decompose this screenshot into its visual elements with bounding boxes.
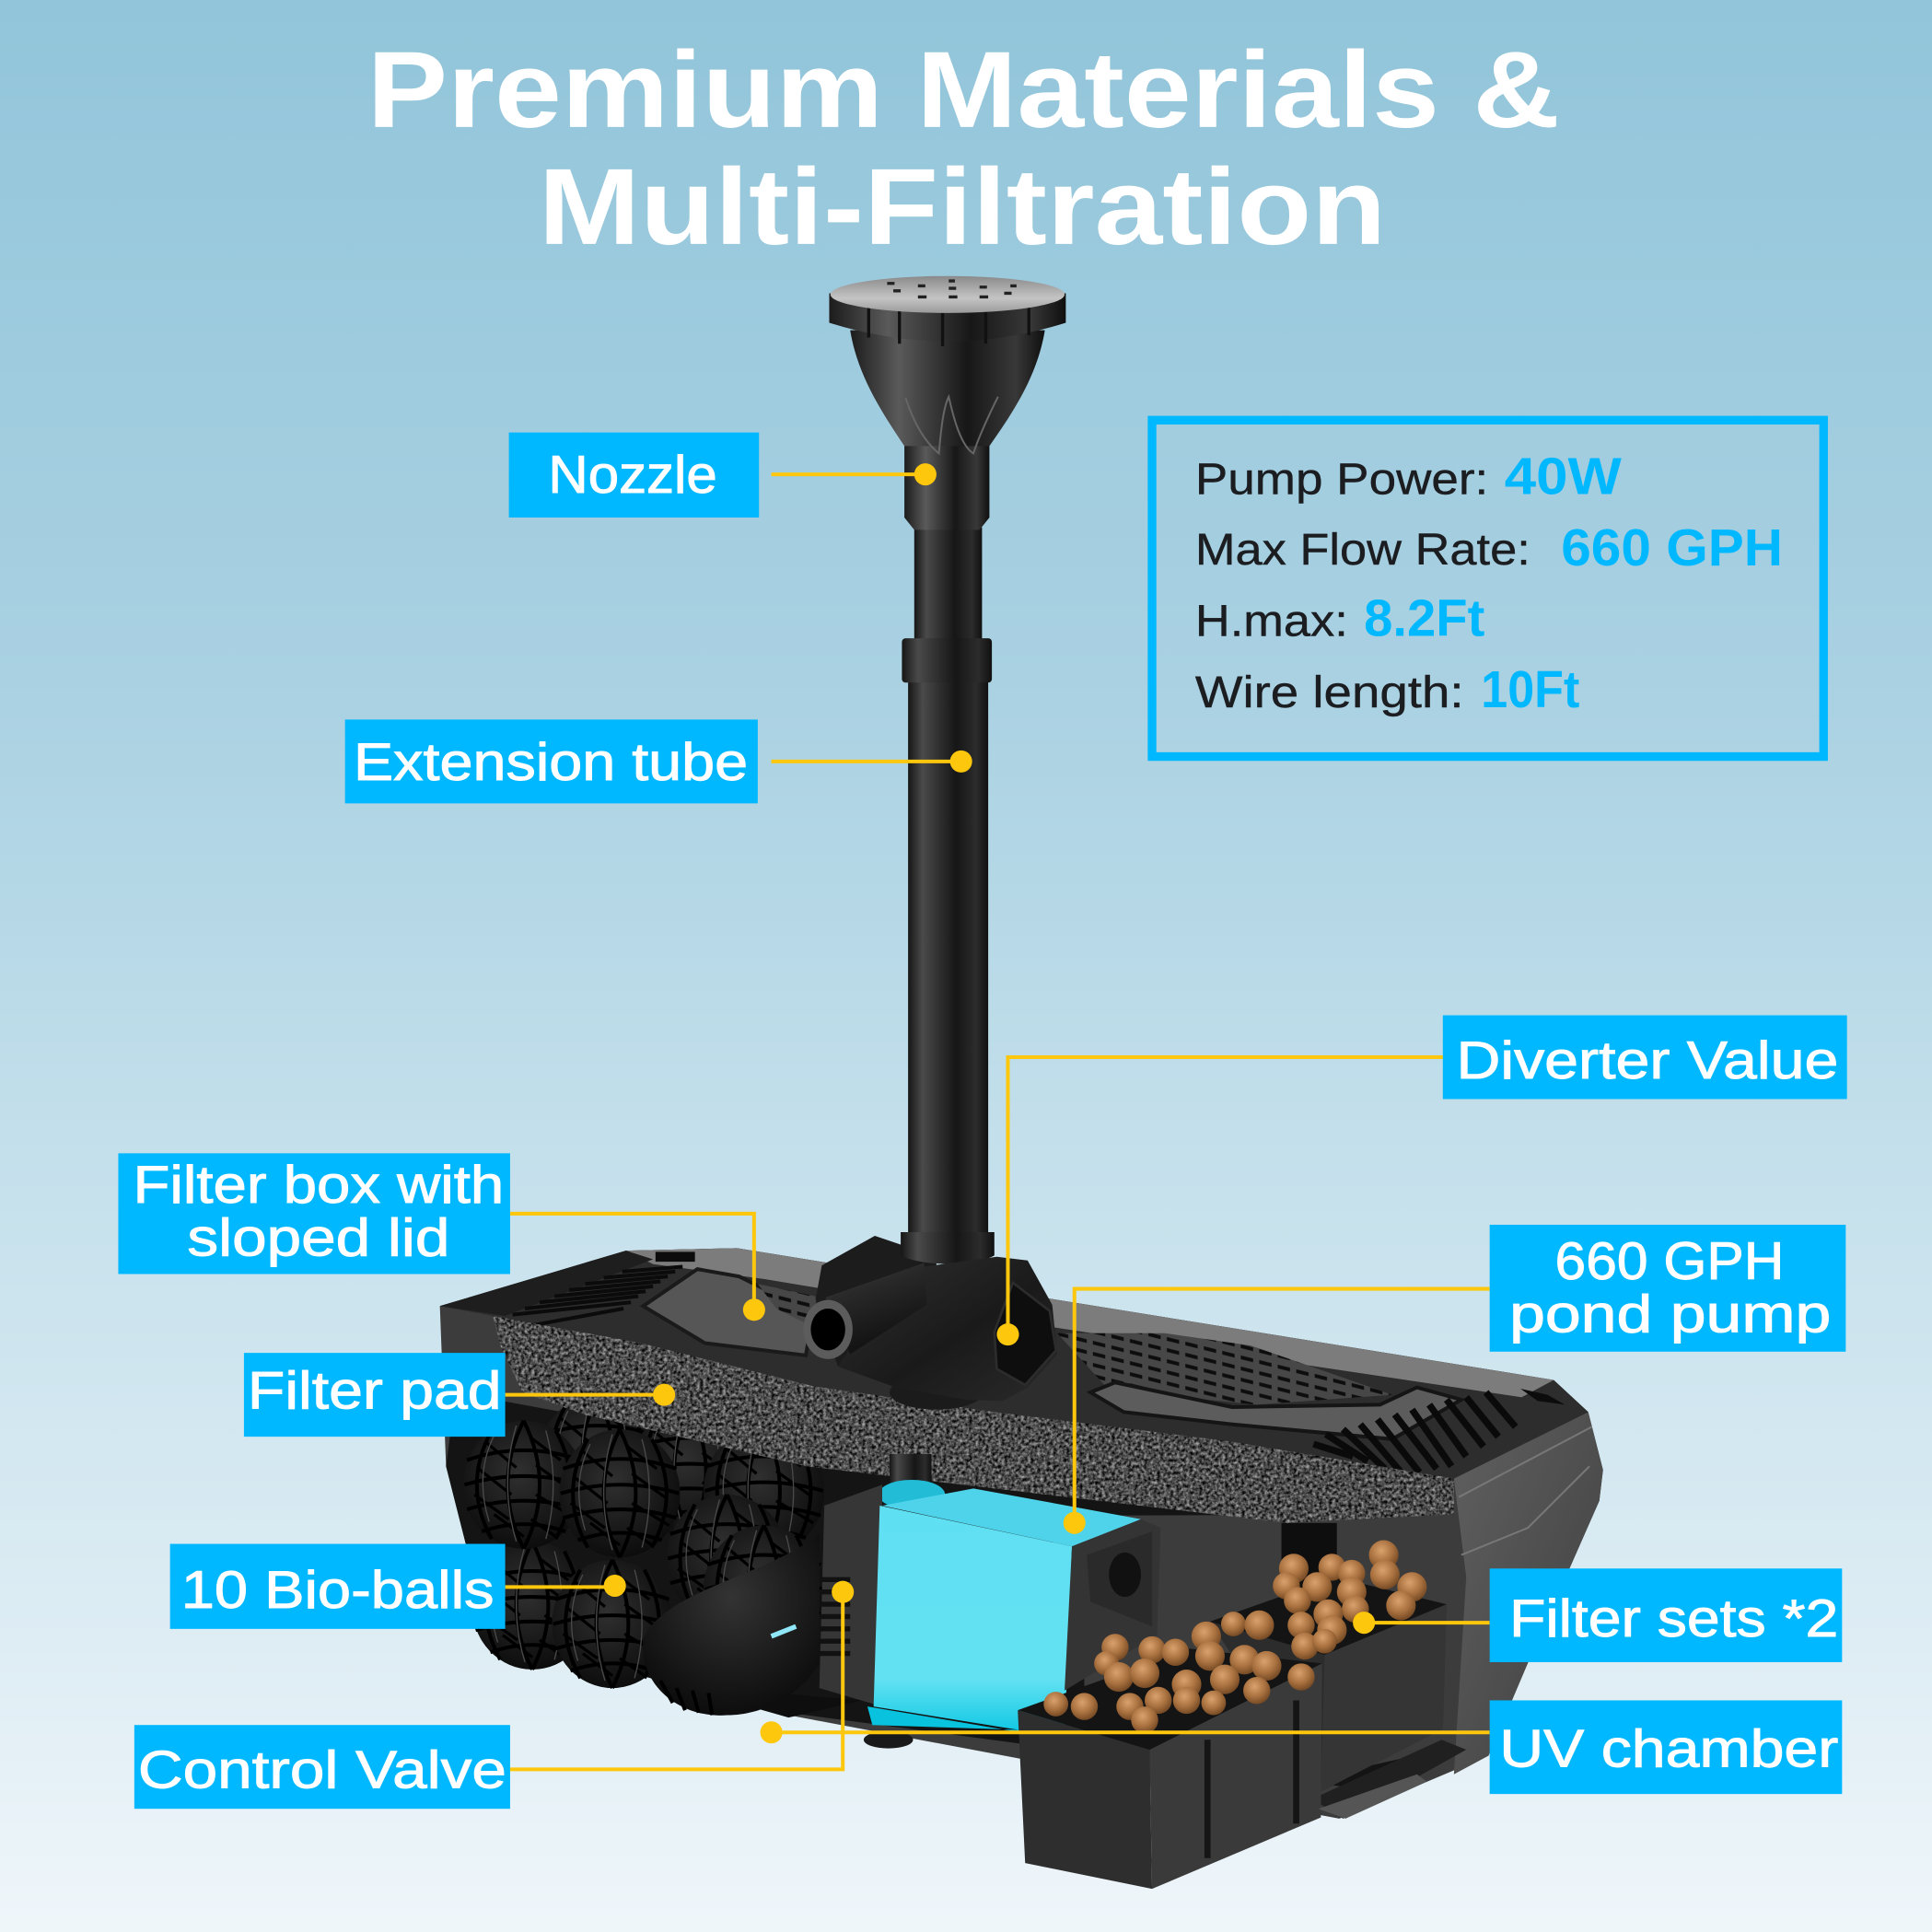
h max: H.max: [1195,596,1348,646]
label: extension tube: Extension tube [354,733,748,792]
label: extension tube [345,719,758,803]
lid panel right [1090,1382,1461,1439]
label: diverter value [1443,1016,1847,1100]
label: diverter value: Diverter Value [1457,1031,1838,1090]
label: pond pump [1490,1225,1845,1352]
label: control valve: Control Valve [138,1740,506,1799]
label: nozzle: Nozzle [548,446,717,505]
lid grid left [758,1284,816,1328]
label: filter box: sloped lid [187,1208,449,1267]
diverter collar [901,1232,995,1263]
pump power [1195,448,1622,506]
nozzle flange [829,293,1065,342]
spec box frame [1152,420,1823,757]
label: nozzle [509,433,759,518]
diverter rear body [816,1236,937,1367]
title: Multi-Filtration [539,145,1386,267]
lid vents right [1313,1392,1516,1473]
max flow rate [1195,518,1783,576]
box floor [481,1601,863,1717]
back tray clay balls [1221,1541,1426,1659]
leader: pond pump [1064,1289,1490,1534]
leader: control valve [510,1581,854,1769]
bio-balls [463,1396,824,1688]
label: filter box: Filter box with [134,1156,504,1215]
leader: diverter [996,1057,1443,1345]
pump cyan top [882,1488,1141,1546]
label: filter pad [244,1353,506,1437]
uv chamber elbow [643,1534,820,1716]
box interior [446,1392,1454,1787]
pump outlet pipe [890,1454,932,1501]
label: filter sets: Filter sets *2 [1509,1589,1838,1648]
filter box product [440,1248,1603,1889]
leader: extension tube [772,751,972,773]
label: control valve [134,1725,510,1809]
pump power: Pump Power: [1195,455,1488,505]
max flow rate: Max Flow Rate: [1195,525,1530,575]
diverter body [838,1257,1057,1401]
spec box [1152,420,1823,757]
h max: 8.2Ft [1364,588,1485,646]
lid top surface [440,1248,1589,1479]
title: Premium Materials & [367,29,1560,150]
leader: filter sets [1353,1612,1490,1634]
wire length [1195,660,1580,718]
leader: uv chamber [761,1721,1490,1743]
back filter tray [1210,1577,1466,1819]
pump power: 40W [1505,448,1622,506]
title [367,29,1560,267]
leader: filter box [510,1214,765,1321]
diverter spout hole [810,1309,845,1350]
diverter base [890,1375,983,1410]
h max [1195,588,1485,646]
label: bio-balls: 10 Bio-balls [181,1561,495,1620]
leader: nozzle [772,463,937,485]
filter sets detail tray bottom rail [1319,1775,1426,1819]
diverter spout [825,1263,926,1354]
diverter spout ring [803,1300,853,1359]
label: filter box [118,1153,510,1274]
leader: bio-balls [506,1575,626,1597]
wire length: Wire length: [1195,668,1464,717]
nozzle [829,276,1065,530]
diverter valve [803,1232,1057,1410]
box shell [440,1248,1603,1819]
label: bio-balls [170,1544,506,1629]
label: filter sets [1490,1568,1842,1662]
label: pond pump: 660 GPH [1555,1232,1784,1291]
box right side wall [1454,1412,1603,1775]
lid vents left [513,1266,682,1326]
pump base and foot [867,1706,1065,1740]
leader: filter pad [506,1384,675,1406]
diverter knob [995,1283,1056,1385]
nozzle cone [850,331,1045,446]
pump left side [820,1484,882,1706]
pump right side [1065,1519,1160,1691]
label: filter pad: Filter pad [248,1361,502,1420]
front filter tray [1018,1648,1322,1889]
wire length: 10Ft [1481,660,1580,718]
label: uv chamber [1490,1700,1842,1794]
max flow rate: 660 GPH [1561,518,1783,576]
pump cyan front [874,1506,1072,1738]
label: uv chamber: UV chamber [1499,1720,1838,1779]
nozzle top [831,276,1065,313]
pond pump [820,1484,1160,1749]
fountain tube [902,528,992,1236]
lid rear slope [626,1248,1554,1397]
front tray clay balls [1043,1622,1315,1734]
lid grid right [1057,1333,1392,1404]
lid panel left [643,1269,813,1356]
filter pad foam [493,1316,1454,1523]
label: pond pump: pond pump [1509,1285,1831,1344]
pump vents [820,1579,850,1654]
nozzle neck [904,441,989,530]
